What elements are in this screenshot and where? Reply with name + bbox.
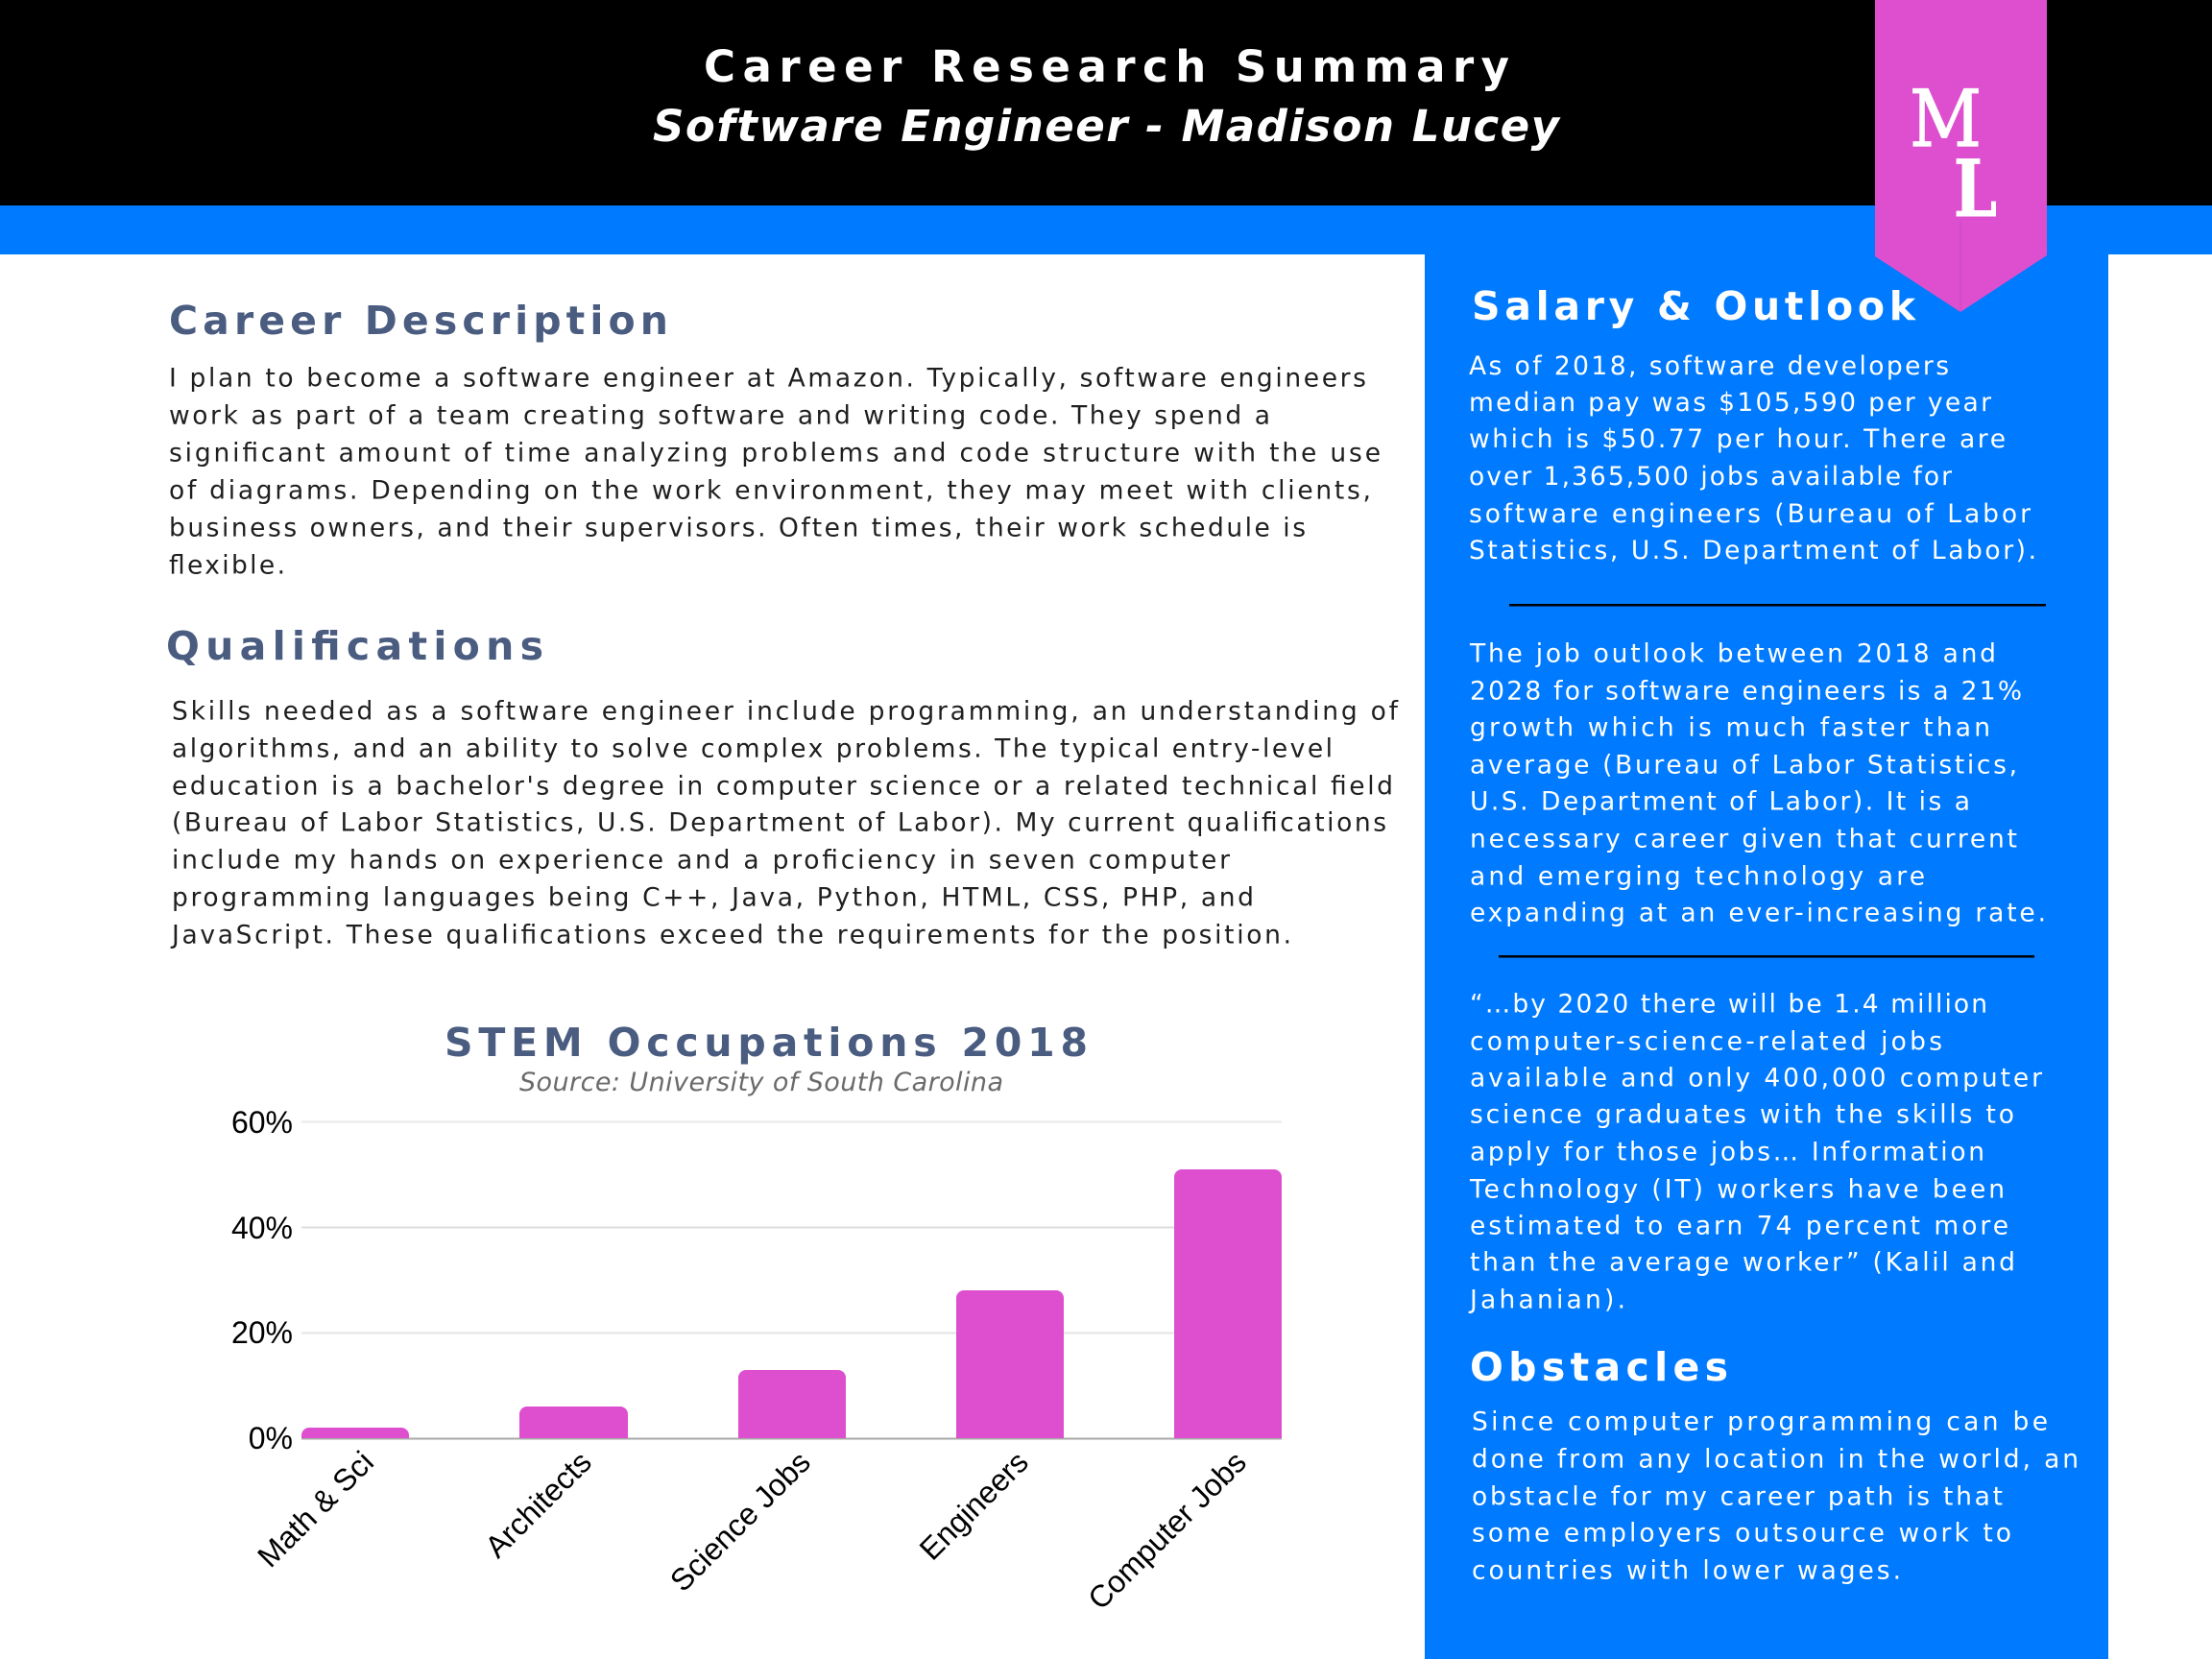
heading: salary and outlook: Salary & Outlook <box>1472 283 1917 329</box>
text: job outlook paragraph: expanding at an ever-increasing rate. <box>1470 899 2046 927</box>
text: job outlook paragraph: growth which is much faster than <box>1470 712 1990 743</box>
x axis labels <box>251 1444 1253 1616</box>
y axis labels: 40% <box>231 1211 293 1245</box>
text: obstacles paragraph <box>1472 1407 2079 1586</box>
text: career description paragraph: work as part of a team creating software and writing code. They spend a <box>169 401 1270 430</box>
text: quotation paragraph: apply for those jobs… Information <box>1470 1137 1984 1167</box>
heading: obstacles: Obstacles <box>1470 1344 1728 1390</box>
icon: monogram ribbon: L <box>1954 144 1997 235</box>
text: job outlook paragraph: average (Bureau of Labor Statistics, <box>1470 751 2017 780</box>
heading: career description: Career Description <box>169 298 668 344</box>
text: qualifications paragraph: algorithms, and an ability to solve complex problems. The typical entry-level <box>172 733 1333 764</box>
text: quotation paragraph: Jahanian). <box>1468 1285 1625 1315</box>
text: career description paragraph: I plan to become a software engineer at Amazon. Typically, software engineers <box>169 363 1366 394</box>
text: job outlook paragraph: necessary career given that current <box>1470 824 2017 854</box>
text: salary paragraph: As of 2018, software developers <box>1469 351 1949 381</box>
text: career description paragraph: significant amount of time analyzing problems and code structure with the use <box>169 438 1381 469</box>
text: career description paragraph: flexible. <box>169 551 285 580</box>
y axis labels: 60% <box>231 1105 293 1140</box>
text: qualifications paragraph <box>170 697 1399 950</box>
x axis labels: Science Jobs <box>663 1444 817 1599</box>
text: quotation paragraph: than the average worker” (Kalil and <box>1470 1248 2015 1277</box>
text: career description paragraph: business owners, and their supervisors. Often times, their work schedule is <box>169 513 1306 543</box>
panel: salary and outlook sidebar <box>1425 254 2108 1659</box>
text: job outlook paragraph: 2028 for software engineers is a 21% <box>1470 676 2022 707</box>
chart title: STEM Occupations 2018 <box>445 1020 1088 1066</box>
y axis labels: 20% <box>231 1315 293 1350</box>
x axis labels: Architects <box>478 1444 598 1564</box>
text: obstacles paragraph: some employers outsource work to <box>1472 1519 2011 1548</box>
icon: monogram ribbon: M <box>1910 75 1982 165</box>
text: career description paragraph: of diagrams. Depending on the work environment, they may meet with clients, <box>169 476 1371 505</box>
y axis labels: 0% <box>249 1421 293 1455</box>
x axis labels: Computer Jobs <box>1081 1444 1253 1616</box>
text: quotation paragraph: science graduates with the skills to <box>1470 1100 2014 1129</box>
text: job outlook paragraph: The job outlook between 2018 and <box>1469 639 1996 668</box>
bars <box>301 1169 1282 1438</box>
header band <box>0 0 2212 254</box>
text: obstacles paragraph: done from any location in the world, an <box>1472 1444 2079 1475</box>
text: salary paragraph: over 1,365,500 jobs available for <box>1469 462 1952 492</box>
text: obstacles paragraph: Since computer programming can be <box>1472 1407 2048 1436</box>
text: qualifications paragraph: programming languages being C++, Java, Python, HTML, CSS, PHP, and <box>172 883 1254 912</box>
text: quotation paragraph: available and only 400,000 computer <box>1470 1064 2042 1093</box>
heading: qualifications: Qualifications <box>166 623 543 669</box>
text: quotation paragraph: “…by 2020 there will be 1.4 million <box>1470 989 1987 1020</box>
text: qualifications paragraph: JavaScript. These qualifications exceed the requirements for the position. <box>170 920 1291 950</box>
text: quotation paragraph: estimated to earn 74 percent more <box>1470 1212 2008 1240</box>
icon: monogram ribbon <box>1875 0 2047 312</box>
text: qualifications paragraph: Skills needed as a software engineer include programming, an understanding of <box>172 697 1399 726</box>
text: quotation paragraph <box>1468 989 2042 1315</box>
x axis labels: Engineers <box>913 1444 1035 1567</box>
text: quotation paragraph: computer-science-related jobs <box>1470 1027 1942 1056</box>
text: quotation paragraph: Technology (IT) workers have been <box>1469 1175 2005 1204</box>
text: salary paragraph: Statistics, U.S. Department of Labor). <box>1469 536 2036 565</box>
text: job outlook paragraph: and emerging technology are <box>1470 862 1925 891</box>
title: Software Engineer - Madison Lucey <box>653 101 1561 152</box>
text: qualifications paragraph: include my hands on experience and a proficiency in seven computer <box>172 845 1230 876</box>
text: salary paragraph: which is $50.77 per hour. There are <box>1469 424 2006 454</box>
text: job outlook paragraph: U.S. Department of Labor). It is a <box>1470 787 1970 816</box>
y axis labels <box>231 1105 293 1455</box>
chart source: Source: University of South Carolina <box>519 1068 1003 1097</box>
title <box>653 41 1561 152</box>
text: qualifications paragraph: (Bureau of Labor Statistics, U.S. Department of Labor). My current qualifications <box>172 808 1386 837</box>
text: salary paragraph: software engineers (Bureau of Labor <box>1469 499 2031 529</box>
title: Career Research Summary <box>704 41 1509 92</box>
text: career description paragraph <box>169 363 1381 580</box>
text: job outlook paragraph <box>1469 639 2046 927</box>
x axis labels: Math & Sci <box>251 1444 380 1574</box>
bar chart: STEM occupations 2018 <box>231 1020 1282 1616</box>
text: qualifications paragraph: education is a bachelor's degree in computer science or a related technical field <box>172 772 1393 801</box>
text: salary paragraph <box>1469 351 2036 565</box>
text: obstacles paragraph: obstacle for my career path is that <box>1472 1482 2003 1511</box>
text: obstacles paragraph: countries with lower wages. <box>1472 1555 1901 1586</box>
text: salary paragraph: median pay was $105,590 per year <box>1469 388 1991 418</box>
